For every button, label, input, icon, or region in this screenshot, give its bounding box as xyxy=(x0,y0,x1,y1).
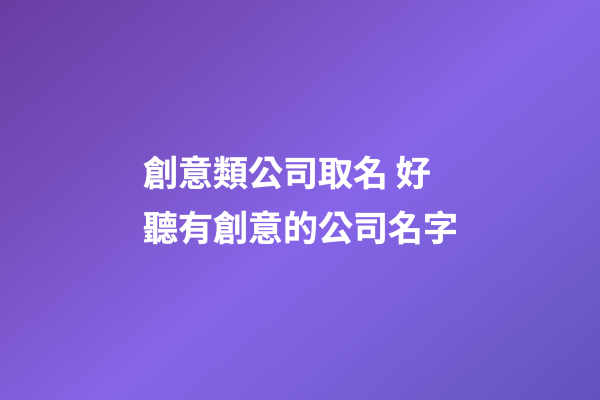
title xyxy=(143,155,458,249)
title line 1: 創意類公司取名 好 xyxy=(143,155,431,194)
title line 2: 聽有創意的公司名字 xyxy=(143,210,458,249)
